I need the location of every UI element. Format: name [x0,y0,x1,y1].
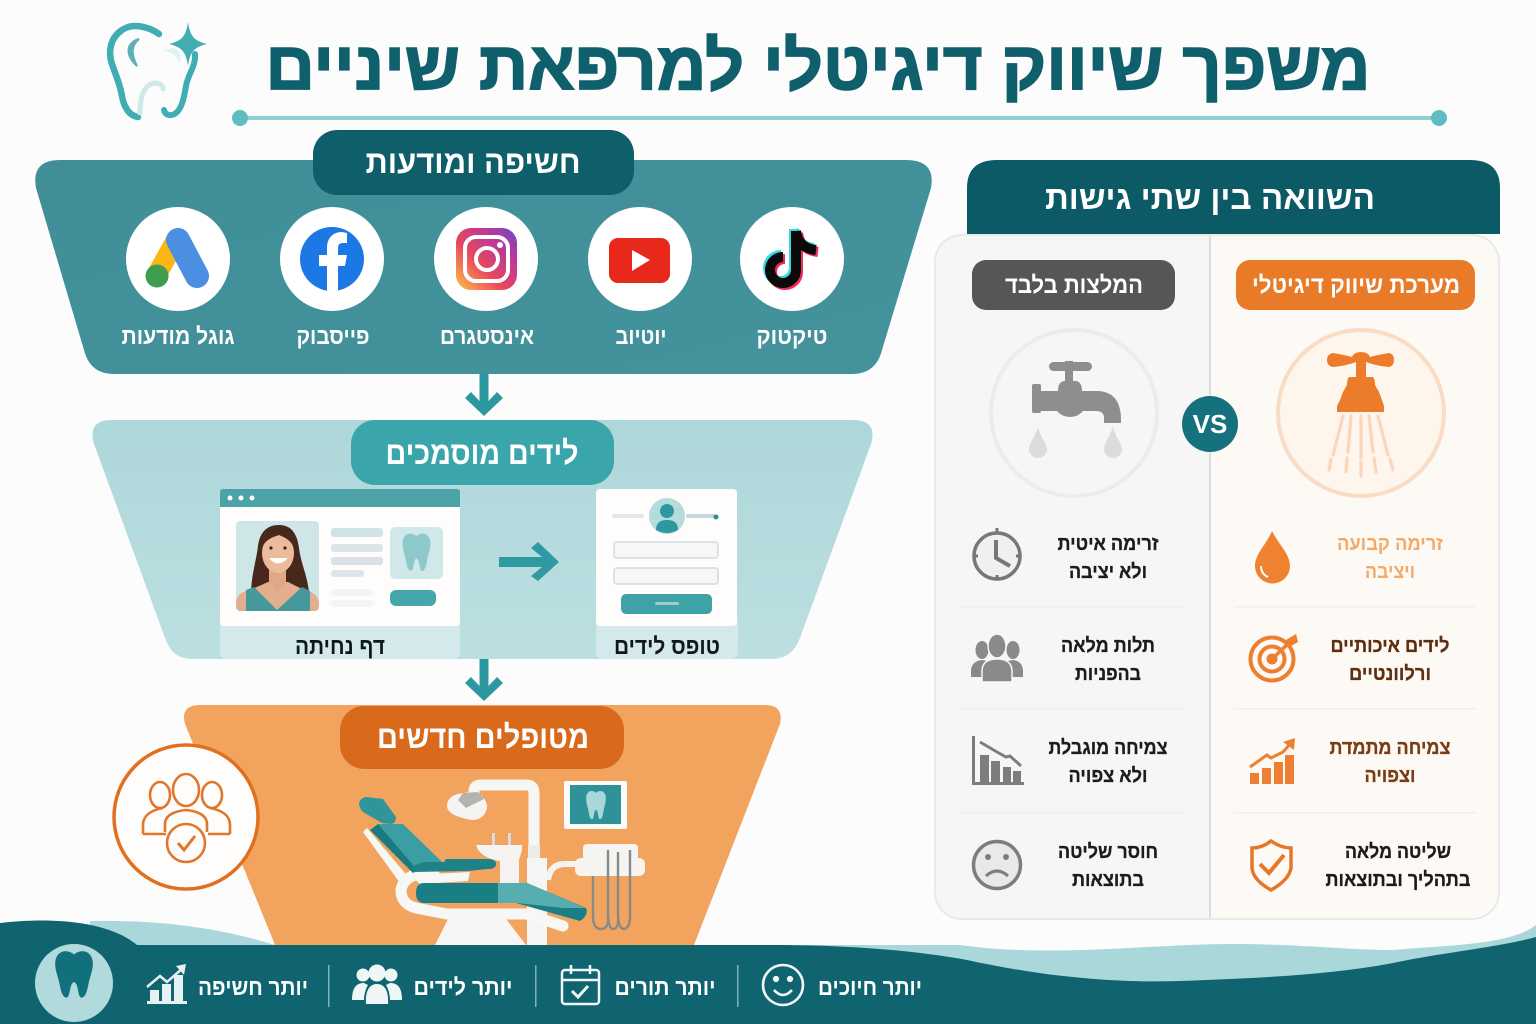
icon: water drop [1255,531,1290,584]
heading: qualified leads [351,420,614,485]
heading: exposure and awareness [313,130,634,195]
text: lack of control: חוסר שליטה [1058,841,1158,863]
row: continuous growth: וצפויה [1364,765,1416,787]
heading: recommendations only [972,260,1175,310]
row: full control [1252,841,1471,891]
title: משפך שיווק דיגיטלי למרפאת שיניים [266,28,1370,104]
icon: dripping faucet [991,330,1157,496]
icon: tiktok [740,207,844,311]
row: quality leads [1250,634,1450,685]
title underline [232,110,1447,126]
panel: new patients funnel stage [184,705,781,945]
monitor [564,781,627,829]
badge: VS [1182,396,1238,452]
label: more appointments: יותר תורים [614,974,716,1000]
label: youtube: יוטיוב [616,323,666,349]
label: tiktok: טיקטוק [756,323,828,349]
text: limited growth: צמיחה מוגבלת [1048,737,1168,759]
text: quality leads: לידים איכותיים [1330,635,1450,657]
icon: more smiles [763,965,803,1005]
arrow: leads to patients [465,659,503,701]
heading: new patients: מטופלים חדשים [377,719,589,755]
landing page card [220,489,460,659]
icon: sad face [974,842,1020,888]
light wave [90,921,1536,1000]
row: full dependency [971,634,1155,685]
armrest [413,859,496,872]
arrow: exposure to leads [465,374,503,416]
row: slow flow [974,528,1159,583]
heading: recommendations only: המלצות בלבד [1005,272,1143,299]
backrest [378,824,442,873]
text: full control: שליטה מלאה [1345,841,1451,863]
icon: target [1250,634,1298,680]
label: lead form: טופס לידים [614,633,720,659]
heading: exposure and awareness: חשיפה ומודעות [366,144,580,180]
lead form card [596,489,738,659]
text: continuous growth: צמיחה מתמדת [1330,737,1450,759]
icon: tooth badge [35,944,113,1022]
badge: VS: VS [1193,409,1227,439]
row: slow flow: ולא יציבה [1069,561,1147,583]
callout: patients icon [114,745,258,889]
label: more exposure: יותר חשיפה [198,974,308,1000]
icon: clock [974,528,1020,579]
panel: comparison table [935,235,1499,919]
icon: tooth logo with sparkle [110,22,207,117]
heading: digital marketing system: מערכת שיווק דיגיטלי [1252,272,1460,299]
icon: youtube [588,207,692,311]
icon: declining chart [972,736,1024,785]
icon: rising chart [1250,738,1295,784]
icon: instagram [434,207,538,311]
row: continuous growth [1250,737,1450,787]
row: steady flow: ויציבה [1365,561,1415,583]
row: full control: בתהליך ובתוצאות [1326,869,1471,891]
row: quality leads: ורלוונטיים [1349,663,1431,685]
instrument tray [548,864,578,880]
row: full dependency: בהפניות [1075,663,1141,685]
arrow: page to form [499,542,559,581]
label: google ads: גוגל מודעות [122,323,234,349]
icon: flowing shower faucet [1278,330,1444,496]
heading: comparison of two approaches [967,160,1500,234]
icon: exposure chart [147,964,187,1004]
footer band [0,920,1536,1024]
seat and leg rest [416,883,587,921]
heading: digital marketing system [1236,260,1475,310]
headrest [359,797,396,824]
text: full dependency: תלות מלאה [1061,635,1155,657]
row: limited growth: ולא צפויה [1068,765,1148,787]
label: more smiles: יותר חיוכים [818,974,922,1000]
icon: google ads [126,207,230,311]
row: steady flow [1255,531,1444,584]
woman photo [236,521,319,611]
heading: qualified leads: לידים מוסמכים [386,435,578,471]
row: lack of control: בתוצאות [1072,869,1144,891]
label: facebook: פייסבוק [296,323,370,349]
label: more leads: יותר לידים [414,974,512,1000]
text: slow flow: זרימה איטית [1058,533,1159,555]
icon: people [971,634,1023,682]
heading: new patients [340,706,624,769]
heading: comparison of two approaches: השוואה בין שתי גישות [1045,179,1375,216]
label: landing page: דף נחיתה [295,633,385,659]
lamp arm and pole [474,785,534,850]
label: instagram: אינסטגרם [440,323,534,349]
icon: facebook [280,207,384,311]
chair base and frame [435,915,526,945]
sink [476,845,522,884]
illustration: dental chair [359,781,645,945]
icon: more leads [352,964,402,1004]
panel: qualified leads funnel stage [92,420,873,659]
panel: exposure funnel stage [35,130,932,374]
text: steady flow: זרימה קבועה [1337,533,1444,555]
row: lack of control [974,841,1158,891]
icon: more appointments [562,965,599,1004]
row: limited growth [972,736,1168,787]
icon: shield [1252,841,1291,890]
